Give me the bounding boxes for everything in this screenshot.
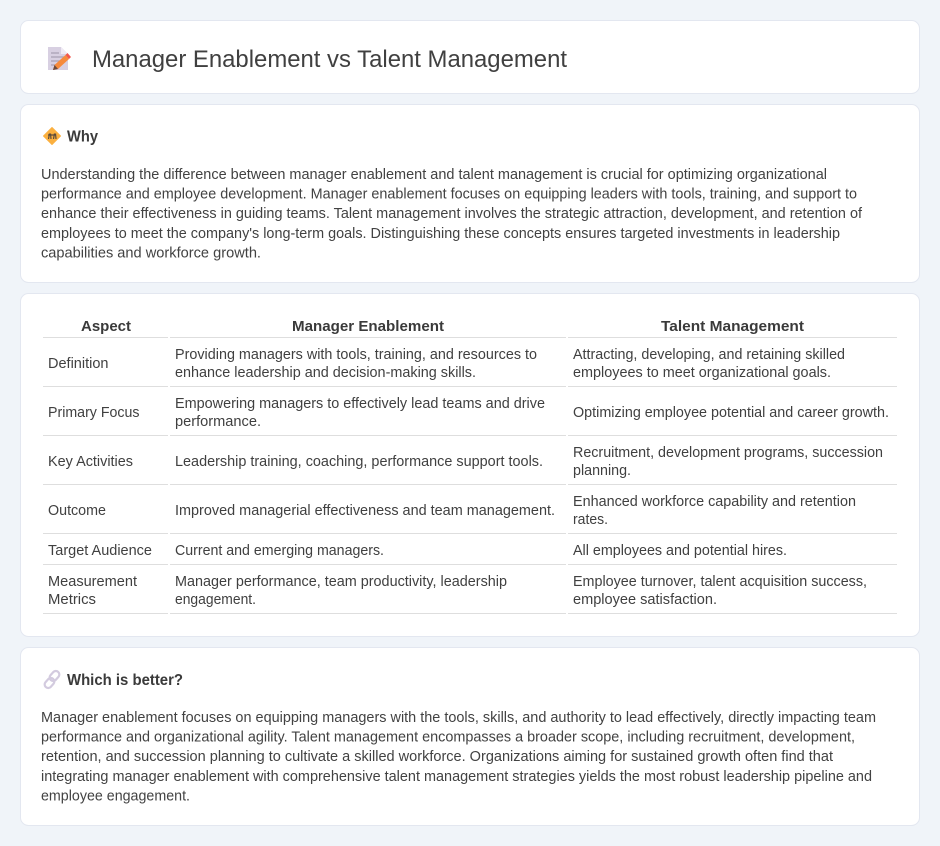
table row: measurement metrics: Measurement	[48, 574, 137, 590]
text block: which is better paragraph: performance and organizational agility. Talent management encompasses a broader scope, including recruitment, development,	[41, 730, 855, 746]
table row: key activities: Recruitment, development programs, succession	[573, 445, 883, 461]
panel: which is better	[20, 648, 920, 826]
table row: definition: Definition	[48, 356, 109, 372]
table row: outcome: Outcome	[48, 503, 106, 519]
table header row	[81, 319, 804, 335]
table row: outcome: Enhanced workforce capability and retention	[573, 494, 856, 510]
icon: chain link	[43, 670, 61, 689]
table row: primary focus: Primary Focus	[48, 405, 140, 421]
table row: measurement metrics: Metrics	[48, 592, 96, 608]
table row: primary focus: Empowering managers to effectively lead teams and drive	[175, 396, 545, 412]
table row: key activities: Leadership training, coaching, performance support tools.	[175, 454, 543, 470]
table row: target audience: Current and emerging managers.	[175, 543, 384, 559]
table row: primary focus	[48, 396, 889, 430]
title: Manager Enablement vs Talent Management	[92, 46, 567, 73]
table header row: Aspect	[81, 319, 131, 335]
text block: why paragraph: Understanding the difference between manager enablement and talent management is crucial for optimizing organizational	[41, 167, 827, 183]
table row: measurement metrics: Employee turnover, talent acquisition success,	[573, 574, 867, 590]
table row: primary focus: Optimizing employee potential and career growth.	[573, 405, 889, 421]
table row: outcome	[48, 494, 856, 528]
text block: which is better paragraph: integrating manager enablement with comprehensive talent management strategies yields the most robust leadership pipeline and	[41, 769, 872, 785]
table header row: Talent Management	[661, 319, 804, 335]
text block: why paragraph: employees to meet the company's long-term goals. Distinguishing these concepts ensures targeted investments in leadership	[41, 226, 840, 242]
panel: title header	[20, 20, 920, 94]
table row: key activities: Key Activities	[48, 454, 133, 470]
heading: which is better: Which is better?	[67, 672, 183, 689]
table row: primary focus: performance.	[175, 414, 261, 430]
table row: outcome: Improved managerial effectiveness and team management.	[175, 503, 555, 519]
table row: measurement metrics: employee satisfaction.	[573, 592, 717, 608]
table row: key activities: planning.	[573, 463, 631, 479]
text block: why paragraph	[41, 167, 862, 261]
table row: definition: employees to meet organizational goals.	[573, 365, 831, 381]
text block: why paragraph: capabilities and workforce growth.	[41, 245, 261, 261]
text block: which is better paragraph	[41, 710, 876, 804]
table row: definition: enhance leadership and decision-making skills.	[175, 365, 476, 381]
table row: measurement metrics: engagement.	[175, 592, 256, 608]
table row: measurement metrics	[48, 574, 867, 608]
text block: why paragraph: performance and employee development. Manager enablement focuses on equipping leaders with tools, training, and support to	[41, 187, 857, 203]
text block: why paragraph: enhance their effectiveness in guiding teams. Talent management involves the strategic attraction, development, and retention of	[41, 206, 862, 222]
panel: why	[20, 104, 920, 282]
text block: which is better paragraph: Manager enablement focuses on equipping managers with the tools, skills, and authority to lead effectively, directly impacting team	[41, 710, 876, 726]
table header row: Manager Enablement	[292, 319, 444, 335]
table row: target audience	[48, 543, 787, 559]
table row: key activities	[48, 445, 883, 479]
icon: orange diamond sign	[44, 128, 60, 144]
text block: which is better paragraph: employee engagement.	[41, 788, 190, 804]
table row: definition: Providing managers with tools, training, and resources to	[175, 347, 537, 363]
table row: measurement metrics: Manager performance, team productivity, leadership	[175, 574, 507, 590]
text block: which is better paragraph: retention, and succession planning to cultivate a skilled workforce. Organizations aiming for sustained growth often find that	[41, 749, 833, 765]
table row: target audience: All employees and potential hires.	[573, 543, 787, 559]
icon: document with pencil	[48, 47, 71, 70]
table row: definition: Attracting, developing, and retaining skilled	[573, 347, 845, 363]
table row: definition	[48, 347, 845, 381]
panel: comparison table	[20, 294, 920, 636]
heading: why: Why	[67, 128, 98, 146]
table row: outcome: rates.	[573, 512, 608, 528]
table row: target audience: Target Audience	[48, 543, 152, 559]
